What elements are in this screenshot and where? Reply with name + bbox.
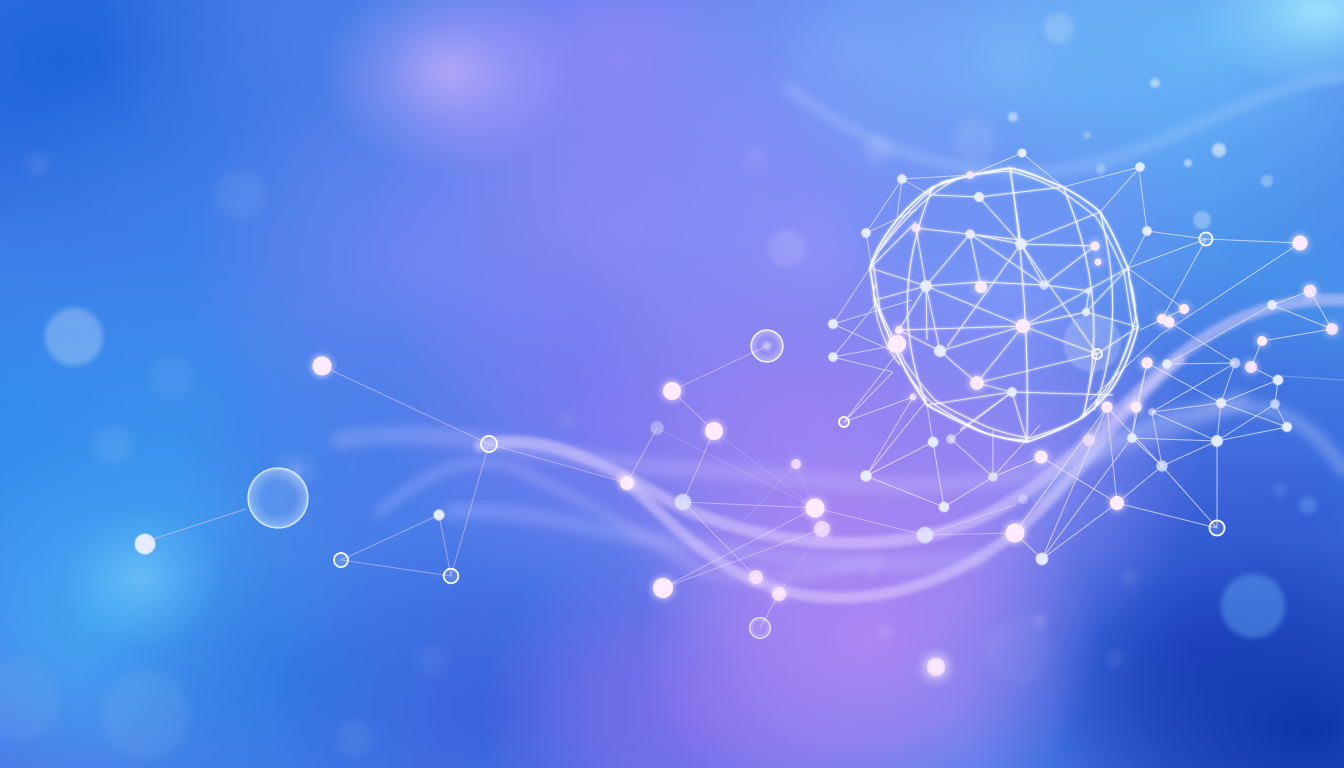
flowing ribbons <box>340 76 1344 598</box>
line: faint far-right strand <box>1282 376 1344 380</box>
ring nodes <box>334 232 1224 583</box>
ribbon: far-left strand <box>450 511 980 564</box>
large bubble, left <box>248 468 308 528</box>
small bubble, upper centre <box>751 330 783 362</box>
ribbon: main wave <box>480 300 1344 543</box>
glowing white orb, lower centre <box>914 645 958 689</box>
wireframe sphere <box>870 168 1138 442</box>
ribbon: top right wave <box>790 76 1344 172</box>
ribbon: left wave <box>380 462 880 579</box>
left chain: connecting lines <box>153 346 767 576</box>
nodes: pale grey-white <box>135 149 1292 565</box>
small bubble, lower centre <box>750 618 770 638</box>
ribbon: soft haze wave <box>340 400 1240 485</box>
lines: mid network, faint <box>657 428 822 594</box>
lines: sphere outer struts <box>833 175 1012 476</box>
translucent disc inside sphere <box>1063 314 1121 372</box>
lines: lower-right network <box>866 153 1332 559</box>
nodes: glowing pink <box>312 171 1338 676</box>
ribbon: lower wave <box>622 360 1180 598</box>
lines: mid network <box>627 391 1015 628</box>
ribbon: right sweep <box>1040 406 1344 500</box>
